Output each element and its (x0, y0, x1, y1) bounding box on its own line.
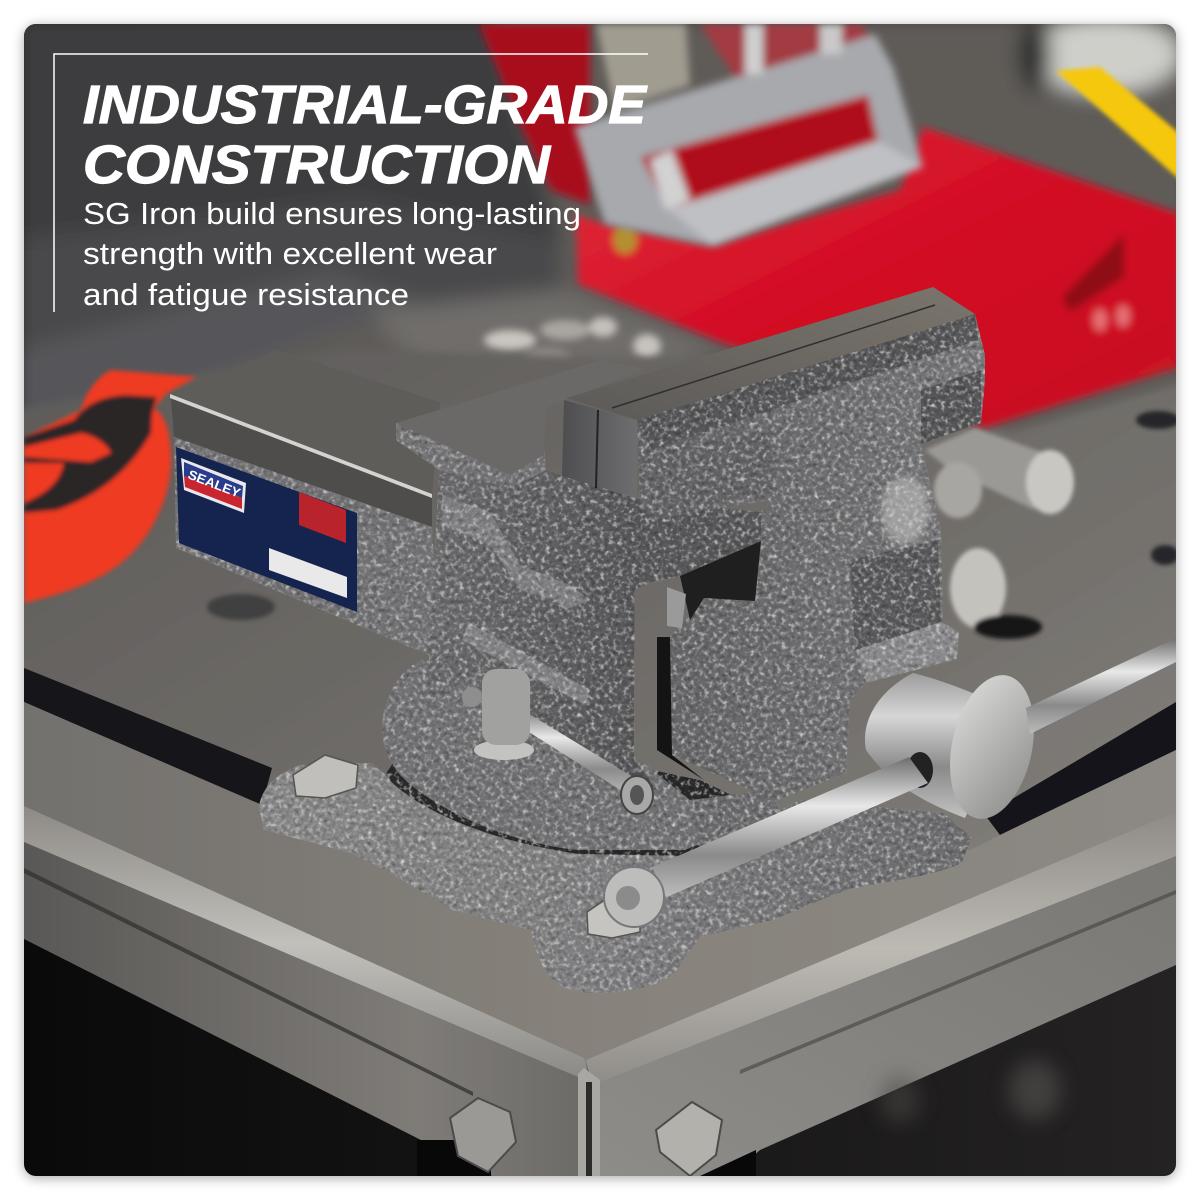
blurred metal pins behind the vise (480, 312, 666, 360)
table corner seam (578, 1068, 600, 1176)
description text: and fatigue resistance (83, 277, 409, 312)
table front face right (590, 835, 1176, 1176)
table plate in front of the vise (24, 702, 1176, 1065)
title (83, 75, 648, 195)
blurred fasteners on the right (207, 411, 1180, 639)
base flange (259, 763, 972, 993)
rear jaw underside block (650, 432, 775, 518)
vise label: blue sticker (176, 447, 357, 612)
vise rear rail (170, 388, 434, 656)
vise casting highlight (881, 476, 929, 544)
disc groove (385, 764, 732, 856)
collar end cap (938, 667, 1046, 827)
vise jaw opening (680, 541, 761, 620)
vise jaw plate (562, 400, 637, 498)
swivel disc (382, 659, 780, 850)
rear jaw lip (637, 314, 978, 450)
table front face left (24, 815, 584, 1176)
title: INDUSTRIAL-GRADE (83, 75, 648, 135)
red toolbox (479, 24, 1180, 428)
embossed slide on front body (442, 495, 590, 610)
screw collar (865, 673, 1015, 818)
vise slit (657, 637, 704, 780)
vise jaw top (566, 287, 975, 420)
vise label: blue sticker: SEALEY (186, 467, 243, 501)
left dark slot in table (24, 668, 272, 805)
swivel base front pillar (690, 790, 780, 850)
embossed brand on front body (462, 622, 590, 705)
description text: strength with excellent wear (83, 236, 497, 271)
table groove right (740, 890, 1176, 1074)
table fold right (586, 812, 1176, 1085)
lock pin rod (510, 706, 638, 796)
blurred workshop background (14, 14, 1194, 454)
table top surface (14, 350, 1190, 1075)
table leg (417, 1140, 756, 1180)
hex bolt left (293, 755, 358, 798)
vise anvil top (396, 360, 645, 475)
lock pin head (462, 669, 653, 814)
table groove left (24, 868, 473, 1096)
rib bright (856, 622, 959, 683)
vise sliding key (667, 587, 686, 628)
rear jaw body (637, 314, 985, 801)
hex bolt front (587, 895, 640, 938)
table fold left (24, 806, 590, 1082)
metal tray (574, 24, 923, 246)
yellow tool (1056, 67, 1180, 180)
description text (83, 196, 581, 312)
rear inner block (634, 498, 761, 590)
rear jaw side shadow (921, 370, 981, 444)
bolts on the table face (450, 1098, 722, 1176)
vise cast body (259, 314, 985, 993)
front jaw body (427, 470, 657, 790)
handle bar rear (1026, 638, 1176, 734)
vise (170, 287, 1176, 993)
collar hole (907, 752, 933, 788)
description text: SG Iron build ensures long-lasting (83, 196, 581, 231)
heading frame line (54, 54, 648, 312)
right dark slot in table (985, 702, 1176, 835)
handle ball end (604, 867, 664, 927)
title: CONSTRUCTION (83, 135, 551, 195)
red pliers handle (24, 370, 197, 603)
blurred lights under the table (880, 1060, 1061, 1124)
handle bar front (652, 757, 928, 897)
anvil side (396, 423, 546, 488)
